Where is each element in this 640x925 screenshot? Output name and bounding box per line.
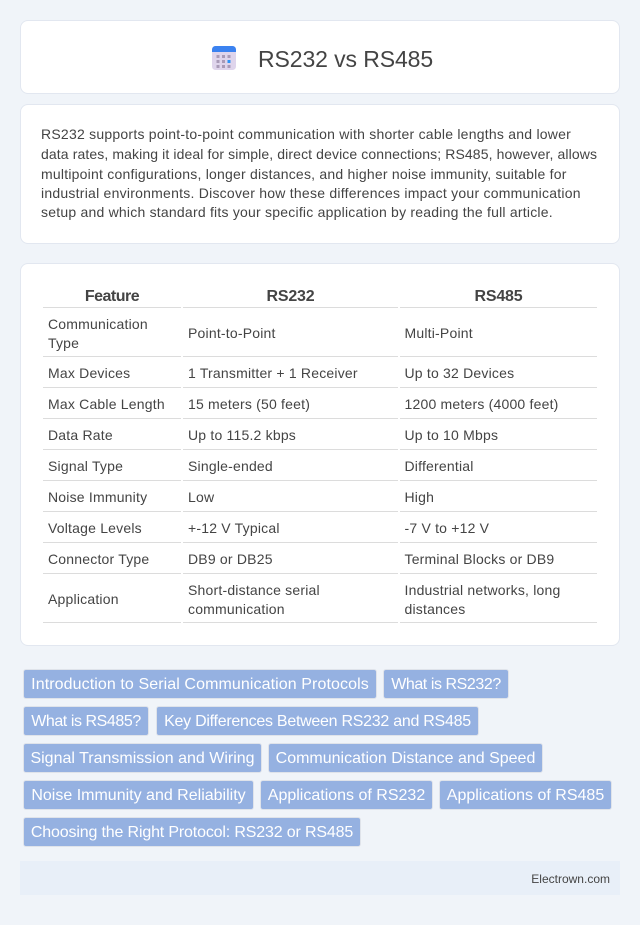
table rows: Voltage Levels — [48, 520, 142, 536]
table rows: Up to 32 Devices — [404, 365, 514, 381]
table rows: distances — [404, 601, 465, 617]
icon: calendar — [212, 46, 236, 70]
table rows: Type — [48, 335, 79, 351]
table rows: Max Cable Length — [48, 396, 165, 412]
table rows: 1200 meters (4000 feet) — [404, 396, 559, 412]
table rows: Up to 10 Mbps — [404, 427, 498, 443]
footer — [20, 861, 620, 895]
table rows: 1 Transmitter + 1 Receiver — [188, 365, 358, 381]
topic tags: Noise Immunity and Reliability — [31, 787, 246, 804]
table header: Feature — [85, 288, 139, 305]
topic tags: Key Differences Between RS232 and RS485 — [164, 713, 471, 730]
table rows: Up to 115.2 kbps — [188, 427, 296, 443]
table rows: Application — [48, 591, 119, 607]
table rows: +-12 V Typical — [188, 520, 280, 536]
table rows: 15 meters (50 feet) — [188, 396, 310, 412]
panel: title header — [20, 20, 620, 94]
summary text: industrial environments. Discover how these differences impact your communication — [41, 185, 581, 201]
table header — [85, 288, 522, 305]
table rows: Short-distance serial — [188, 582, 320, 598]
table rows: DB9 or DB25 — [188, 551, 273, 567]
topic tags: Signal Transmission and Wiring — [30, 750, 255, 767]
summary text: RS232 supports point-to-point communication with shorter cable lengths and lower — [41, 126, 571, 142]
table rows: Multi-Point — [404, 325, 473, 341]
table rows: Point-to-Point — [188, 325, 276, 341]
title: RS232 vs RS485 — [258, 46, 433, 72]
summary text — [41, 126, 597, 220]
topic tags: What is RS485? — [31, 713, 141, 730]
table rows: -7 V to +12 V — [404, 520, 489, 536]
topic tags: Applications of RS485 — [447, 787, 604, 804]
panel: comparison table — [20, 263, 620, 646]
table rows: Terminal Blocks or DB9 — [404, 551, 554, 567]
table header: RS485 — [475, 288, 522, 305]
table rows: High — [404, 489, 434, 505]
table rows: Differential — [404, 458, 474, 474]
table rows: Industrial networks, long — [404, 582, 560, 598]
table rows: Signal Type — [48, 458, 123, 474]
summary text: setup and which standard fits your specific application by reading the full article. — [41, 204, 553, 220]
table rows: Connector Type — [48, 551, 149, 567]
table rows: Low — [188, 489, 214, 505]
topic tags: Choosing the Right Protocol: RS232 or RS485 — [31, 824, 353, 841]
topic tags: Applications of RS232 — [268, 787, 425, 804]
table rows: communication — [188, 601, 285, 617]
table header: RS232 — [267, 288, 314, 305]
table rows: Noise Immunity — [48, 489, 147, 505]
summary text: data rates, making it ideal for simple, direct device connections; RS485, however, allows — [41, 146, 597, 162]
table rows — [43, 307, 597, 623]
table rows: Data Rate — [48, 427, 113, 443]
topic tags: What is RS232? — [391, 676, 501, 693]
table rows: Communication — [48, 316, 148, 332]
topic tags — [23, 669, 612, 847]
table rows: Single-ended — [188, 458, 273, 474]
table rows: Max Devices — [48, 365, 130, 381]
summary text: multipoint configurations, longer distances, and higher noise immunity, suitable for — [41, 166, 567, 182]
topic tags: Introduction to Serial Communication Protocols — [31, 676, 369, 693]
topic tags: Communication Distance and Speed — [276, 750, 535, 767]
panel: summary — [20, 104, 620, 244]
footer credit: Electrown.com — [531, 872, 610, 886]
